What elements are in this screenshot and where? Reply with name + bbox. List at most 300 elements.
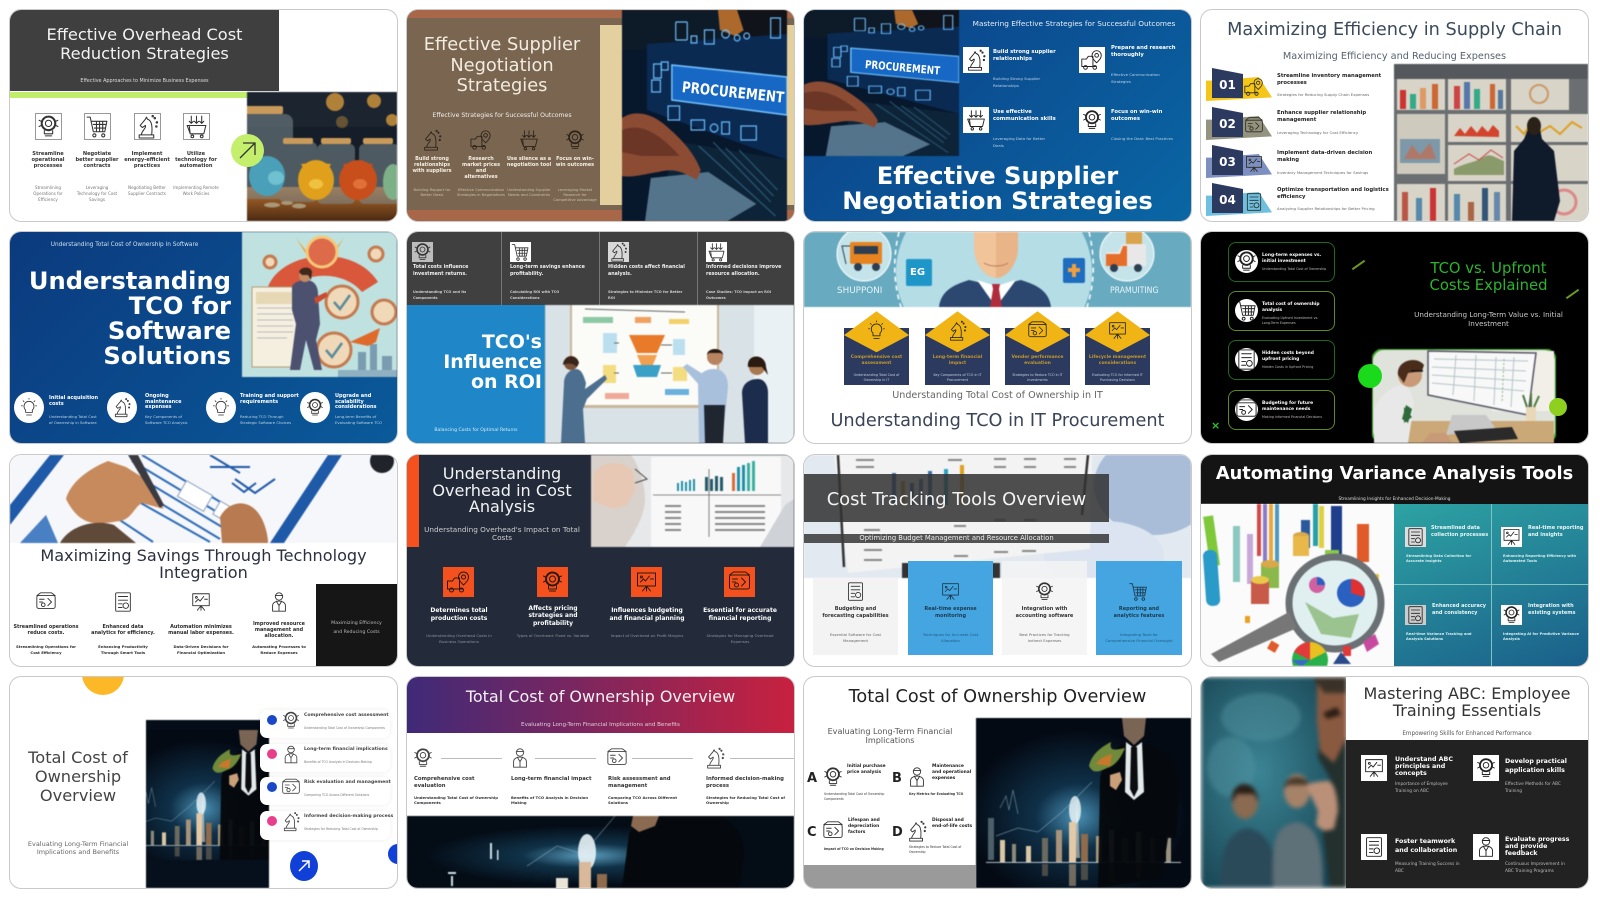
title: Understanding TCO in IT Procurement — [830, 411, 1164, 431]
subtitle — [1389, 311, 1588, 328]
photo: businessman and skyline close-up — [407, 816, 794, 888]
heading: Influences budgeting — [611, 607, 683, 614]
note: Measuring Training Success in — [1395, 862, 1460, 867]
icon — [822, 820, 844, 842]
note: Procurement — [947, 378, 968, 382]
heading: alternatives — [464, 174, 498, 180]
icon — [1234, 348, 1258, 371]
item: automation — [168, 591, 234, 657]
photo: procurement laptop — [804, 10, 960, 157]
heading — [246, 621, 312, 639]
icon — [963, 107, 989, 133]
dark panel — [1346, 740, 1588, 888]
heading: Long-term financial — [933, 355, 982, 360]
panel: overhead cost reduction slide — [10, 10, 397, 221]
heading: Evaluate progress — [1505, 836, 1569, 843]
heading: Total costs influence — [413, 265, 468, 270]
title: Integration — [159, 562, 248, 582]
note: Competitive Advantage — [553, 198, 597, 202]
note: Calculating ROI with TCO — [510, 290, 559, 294]
note: Leveraging — [86, 185, 108, 190]
icon — [822, 766, 844, 788]
heading: and financial planning — [609, 615, 685, 622]
heading — [601, 607, 693, 624]
item: upgrade — [300, 392, 395, 426]
title: Ownership — [35, 767, 121, 786]
heading — [413, 265, 468, 278]
icon — [190, 591, 212, 613]
icon — [608, 242, 629, 262]
note — [608, 290, 682, 301]
heading — [813, 606, 898, 620]
heading — [335, 394, 377, 411]
heading: Initial purchase — [847, 764, 886, 769]
heading: scalability — [335, 398, 364, 404]
step icon — [1244, 154, 1264, 174]
note — [1406, 554, 1471, 564]
heading: Risk evaluation and management — [304, 780, 391, 785]
subtitle — [407, 526, 597, 543]
note: Savings — [89, 197, 105, 202]
letter: B — [892, 771, 902, 786]
note: Key Components of — [145, 414, 182, 419]
step 03 — [1206, 145, 1272, 178]
heading — [1431, 524, 1488, 538]
heading: allocation. — [265, 633, 293, 639]
heading — [1096, 606, 1182, 620]
heading — [1505, 836, 1569, 857]
item: risk evaluation — [260, 777, 390, 805]
heading — [848, 818, 880, 836]
icon — [412, 242, 433, 262]
icon — [211, 397, 231, 418]
note — [128, 185, 166, 196]
heading: Long-term expenses vs. — [1262, 253, 1321, 258]
panel: cost tracking tools slide — [804, 455, 1191, 666]
heading: Integration with — [1022, 606, 1067, 612]
heading: Total cost of ownership — [1262, 302, 1320, 307]
panel: TCO software slide — [10, 232, 397, 443]
item: reporting — [1501, 527, 1585, 567]
subtitle: Investment — [1468, 319, 1509, 328]
card: lifecycle — [1085, 311, 1150, 385]
icon circle — [206, 392, 236, 423]
heading — [145, 394, 182, 411]
subtitle: Empowering Skills for Enhanced Performance — [1402, 731, 1532, 737]
title: TCO for — [129, 292, 231, 320]
icon — [947, 320, 968, 341]
panel: supplier negotiation brown slide — [407, 10, 794, 221]
note: Technology for Cost — [77, 191, 117, 196]
heading: Upgrade and — [335, 393, 371, 399]
title: Strategies — [457, 75, 547, 96]
note: Benefits of TCO Analysis in Decision — [511, 795, 588, 800]
note: Streamlining Data Collection for — [1406, 554, 1471, 558]
note: Management — [843, 638, 868, 643]
panel text: and Reducing Costs — [333, 630, 380, 634]
header band — [1201, 455, 1588, 504]
step backing — [1206, 77, 1272, 101]
note: Hidden Costs in Upfront Pricing — [1262, 365, 1313, 369]
heading: monitoring — [935, 612, 966, 618]
icon — [1079, 107, 1105, 133]
title: Negotiation Strategies — [842, 186, 1153, 214]
icon — [470, 130, 491, 150]
icon — [19, 397, 39, 418]
note: Strategies to Reduce Total Cost of — [909, 845, 961, 849]
heading: and — [476, 168, 486, 174]
photo: hands on blueprint — [10, 455, 397, 543]
note: Closing the Deal: Best Practices — [1111, 136, 1173, 141]
note: Strategies to Reduce TCO in IT — [1012, 373, 1063, 377]
heading — [31, 151, 65, 169]
item: long-term — [1228, 242, 1335, 282]
partial blue button — [388, 844, 408, 864]
heading: investment returns. — [413, 272, 467, 277]
title: Training Essentials — [1393, 701, 1541, 720]
step number — [1212, 145, 1243, 175]
icon — [606, 747, 628, 769]
item: operations — [13, 591, 79, 657]
title band — [804, 474, 1109, 522]
note: Expenses — [731, 639, 749, 644]
heading: Real-time reporting — [1528, 524, 1583, 530]
title: TCO's — [482, 331, 542, 353]
gold diamond — [925, 311, 990, 352]
note: Impact of Overhead on Profit Margins — [611, 633, 683, 638]
item: decision making — [260, 811, 390, 840]
note — [246, 644, 312, 655]
dot — [267, 715, 277, 725]
icon — [1473, 834, 1499, 860]
note — [1503, 632, 1579, 642]
item: relationships — [412, 130, 452, 197]
step text 04: Optimize transportation and logistics — [1277, 186, 1389, 192]
note: Solutions — [608, 800, 628, 805]
heading — [49, 395, 98, 407]
item: financial implications — [260, 744, 390, 772]
item: automation — [173, 113, 219, 196]
heading: Ongoing — [145, 393, 169, 399]
item: analytics — [90, 591, 156, 657]
heading — [993, 49, 1056, 62]
heading: profitability — [533, 620, 573, 627]
item: research — [457, 130, 505, 197]
illustration caption right: PRAMUITING — [1110, 286, 1158, 296]
icon — [520, 130, 538, 150]
heading: upfront pricing — [1262, 357, 1299, 362]
note — [553, 188, 597, 202]
heading: Implement — [132, 151, 162, 157]
icon circle — [300, 392, 330, 423]
heading: Enhanced accuracy — [1432, 602, 1486, 608]
note: Better Deals — [421, 193, 443, 197]
photo: man at spreadsheet — [1372, 349, 1556, 443]
heading: Disposal and — [932, 818, 964, 823]
note: Comparing TCO Across Different Solutions — [304, 793, 369, 797]
heading: Maintenance — [932, 764, 964, 769]
subtitle: Balancing Costs for Optimal Returns — [434, 428, 518, 433]
note: Understanding Supplier — [507, 188, 551, 192]
title — [1346, 685, 1588, 719]
note — [76, 185, 117, 202]
item A — [807, 763, 891, 803]
subtitle: Evaluating Long-Term Financial Implications and Benefits — [521, 722, 680, 728]
note: Strategies for Reducing Total Cost of Ownership — [304, 827, 378, 831]
item: cost assessment — [260, 710, 390, 738]
icon — [1107, 320, 1128, 341]
note: Understanding Total Cost — [49, 414, 97, 419]
item: acquisition — [14, 392, 106, 426]
heading: Risk assessment and — [608, 776, 671, 782]
heading: and provide — [1505, 843, 1547, 850]
icon — [906, 820, 928, 842]
heading: win outcomes — [556, 162, 594, 168]
item: practical skills — [1473, 755, 1578, 795]
item: supplier relationships — [963, 47, 1056, 88]
title: Effective Overhead Cost — [47, 24, 242, 44]
note: Comprehensive Financial Oversight — [1105, 638, 1173, 643]
connector — [632, 758, 693, 759]
icon — [940, 581, 961, 602]
note — [49, 414, 97, 426]
heading: and consistency — [1432, 610, 1477, 616]
subtitle: Implications and Benefits — [37, 848, 119, 856]
heading — [124, 151, 170, 169]
heading: forecasting capabilities — [822, 612, 889, 618]
note: Effective Communication — [1111, 72, 1160, 77]
heading: Informed decision-making — [706, 776, 784, 782]
note: Case Studies: TCO Impact on ROI — [706, 290, 771, 294]
heading: Prepare and research — [1111, 44, 1176, 50]
heading: Training and support — [240, 393, 299, 399]
photo: spreadsheet on monitor — [804, 455, 1191, 578]
icon — [724, 567, 755, 597]
heading: factors — [848, 830, 865, 835]
icon — [631, 567, 662, 597]
heading: management — [608, 783, 647, 789]
heading: collection processes — [1431, 532, 1488, 538]
heading: with suppliers — [412, 168, 452, 174]
note — [993, 136, 1045, 149]
icon — [1405, 527, 1426, 547]
note — [925, 373, 990, 383]
heading — [993, 108, 1056, 122]
title: Analysis — [469, 497, 535, 516]
step icon — [1244, 77, 1264, 97]
item: teamwork — [1361, 834, 1466, 874]
item: budgeting — [601, 567, 693, 647]
heading: energy-efficient — [124, 157, 170, 163]
note: Outcomes — [706, 296, 726, 300]
heading: contracts — [83, 163, 111, 169]
navy body — [1005, 328, 1070, 385]
heading — [168, 624, 234, 637]
note — [824, 792, 884, 801]
item: negotiate — [75, 113, 119, 202]
note: Ownership in IT — [864, 378, 889, 382]
heading: Lifespan and — [848, 818, 880, 823]
card: vendor performance — [1005, 311, 1070, 385]
note: Continuous Improvement in — [1505, 862, 1565, 867]
icon — [412, 747, 434, 769]
photo: businessman and skyline — [146, 720, 269, 888]
heading: Focus on win-win — [1111, 108, 1162, 114]
step icon — [1244, 116, 1264, 136]
heading — [1528, 524, 1583, 538]
heading: analysis — [1262, 308, 1282, 313]
title — [1389, 261, 1588, 294]
heading: resource allocation. — [706, 272, 760, 277]
heading: Integration with — [1528, 602, 1574, 608]
note: Leveraging Data for Better — [993, 136, 1045, 141]
note: Benefits of TCO Analysis in Decision Making — [304, 760, 372, 764]
item: pricing — [507, 567, 599, 647]
step text 01: Strategies for Reducing Supply Chain Expenses — [1277, 92, 1369, 97]
item B — [892, 763, 976, 803]
item: integration — [1501, 605, 1585, 645]
heading: Build strong — [415, 156, 449, 162]
note: Making — [511, 800, 527, 805]
heading: requirements — [240, 398, 278, 404]
heading: Improved resource — [253, 621, 305, 627]
panel: TCO influence on ROI slide — [407, 232, 794, 443]
heading: Initial acquisition — [49, 395, 98, 401]
photo: analyst with charts — [591, 455, 794, 547]
heading: reduce costs. — [28, 630, 64, 636]
gold diamond — [1005, 311, 1070, 352]
title — [10, 548, 397, 581]
heading: analytics features — [1114, 612, 1164, 618]
heading: operational — [31, 157, 65, 163]
step text 03 — [1277, 150, 1372, 176]
title — [10, 269, 231, 369]
title — [407, 333, 542, 393]
note: Strategies in Negotiations — [457, 193, 505, 197]
timeline item: financial impact — [507, 747, 597, 809]
note — [1262, 316, 1318, 326]
gold diamond — [1085, 311, 1150, 352]
note: Data-Driven Decisions for — [174, 644, 228, 649]
icon — [510, 242, 531, 262]
top strip — [407, 10, 794, 18]
note: Deals — [993, 142, 1004, 148]
icon — [281, 811, 301, 832]
subtitle: Mastering Effective Strategies for Successful Outcomes — [973, 19, 1175, 28]
subtitle: Effective Approaches to Minimize Business Expenses — [80, 78, 209, 84]
note: Allocation — [941, 638, 960, 643]
note: Training — [1505, 789, 1522, 794]
subtitle band — [804, 534, 1109, 543]
icon — [268, 591, 290, 613]
note: Integrating Tools for — [1120, 632, 1158, 637]
procurement banner text: PROCUREMENT — [864, 58, 941, 78]
heading — [1085, 355, 1150, 367]
note — [1505, 781, 1561, 795]
note: Implementing Remote — [173, 185, 219, 190]
note: Enhancing Reporting Efficiency with — [1503, 554, 1576, 558]
icon circle — [14, 392, 44, 423]
bottom strip — [407, 210, 794, 221]
heading: considerations — [1099, 361, 1136, 366]
heading — [1005, 355, 1070, 367]
note: Components — [414, 800, 441, 805]
panel: TCO vs upfront slide — [1201, 232, 1588, 443]
heading: production costs — [431, 615, 487, 622]
heading — [414, 776, 474, 790]
note: Effective Methods for ABC — [1505, 782, 1561, 787]
icon — [537, 567, 568, 597]
note: Effective Communication — [458, 188, 504, 192]
heading — [1262, 401, 1313, 413]
note — [335, 414, 382, 426]
step 04 — [1206, 183, 1272, 216]
title — [424, 34, 580, 96]
icon — [281, 744, 301, 765]
step number: 03 — [1219, 155, 1236, 169]
photo: piggy bank jars — [246, 91, 397, 221]
note: Supplier Contracts — [128, 191, 166, 196]
heading: Streamlined data — [1431, 524, 1480, 530]
note: ABC — [1395, 869, 1404, 874]
heading — [507, 156, 551, 168]
green dot right — [1549, 398, 1567, 416]
note: Investments — [1027, 378, 1048, 382]
note: Comparing TCO Across Different — [608, 795, 677, 800]
dot — [267, 782, 277, 792]
letter: A — [807, 771, 817, 786]
title: Overhead in Cost — [432, 480, 572, 500]
note: Cost Efficiency — [30, 650, 62, 655]
heading — [1528, 602, 1575, 616]
note — [1002, 632, 1087, 645]
note: Techniques for Accurate Cost — [923, 632, 978, 637]
column: hidden costs — [600, 232, 698, 305]
note — [90, 644, 156, 655]
subtitle: Understanding Overhead's Impact on Total — [424, 525, 580, 534]
note — [507, 188, 551, 197]
heading: practices — [134, 163, 160, 169]
note — [511, 796, 588, 806]
subtitle: Evaluating Long-Term Financial — [28, 840, 128, 848]
heading — [240, 394, 299, 405]
note: Strategies to Minimize TCO for Better — [608, 290, 682, 294]
panel: overhead in cost analysis slide — [407, 455, 794, 666]
heading: Research — [468, 156, 494, 162]
note: ROI — [608, 296, 615, 300]
heading: market prices — [462, 162, 500, 168]
title: Total Cost of Ownership Overview — [466, 687, 735, 706]
title — [407, 466, 597, 516]
step text 02 — [1277, 110, 1366, 136]
note: Work Policies — [183, 191, 209, 196]
navy body — [1085, 328, 1150, 385]
heading — [1395, 837, 1457, 855]
note: Operations for — [33, 191, 63, 196]
accent dash 1 — [1352, 260, 1365, 270]
note: Analysis Solutions — [1406, 637, 1443, 641]
heading: accounting software — [1016, 612, 1073, 618]
arrow badge — [231, 134, 264, 167]
note: Indirect Expenses — [1028, 638, 1061, 643]
icon — [1234, 299, 1258, 322]
note — [145, 414, 188, 426]
heading — [932, 764, 971, 782]
heading — [507, 605, 599, 627]
heading — [844, 355, 909, 367]
step text 03: Implement data-driven decision — [1277, 150, 1372, 156]
note — [413, 188, 450, 197]
